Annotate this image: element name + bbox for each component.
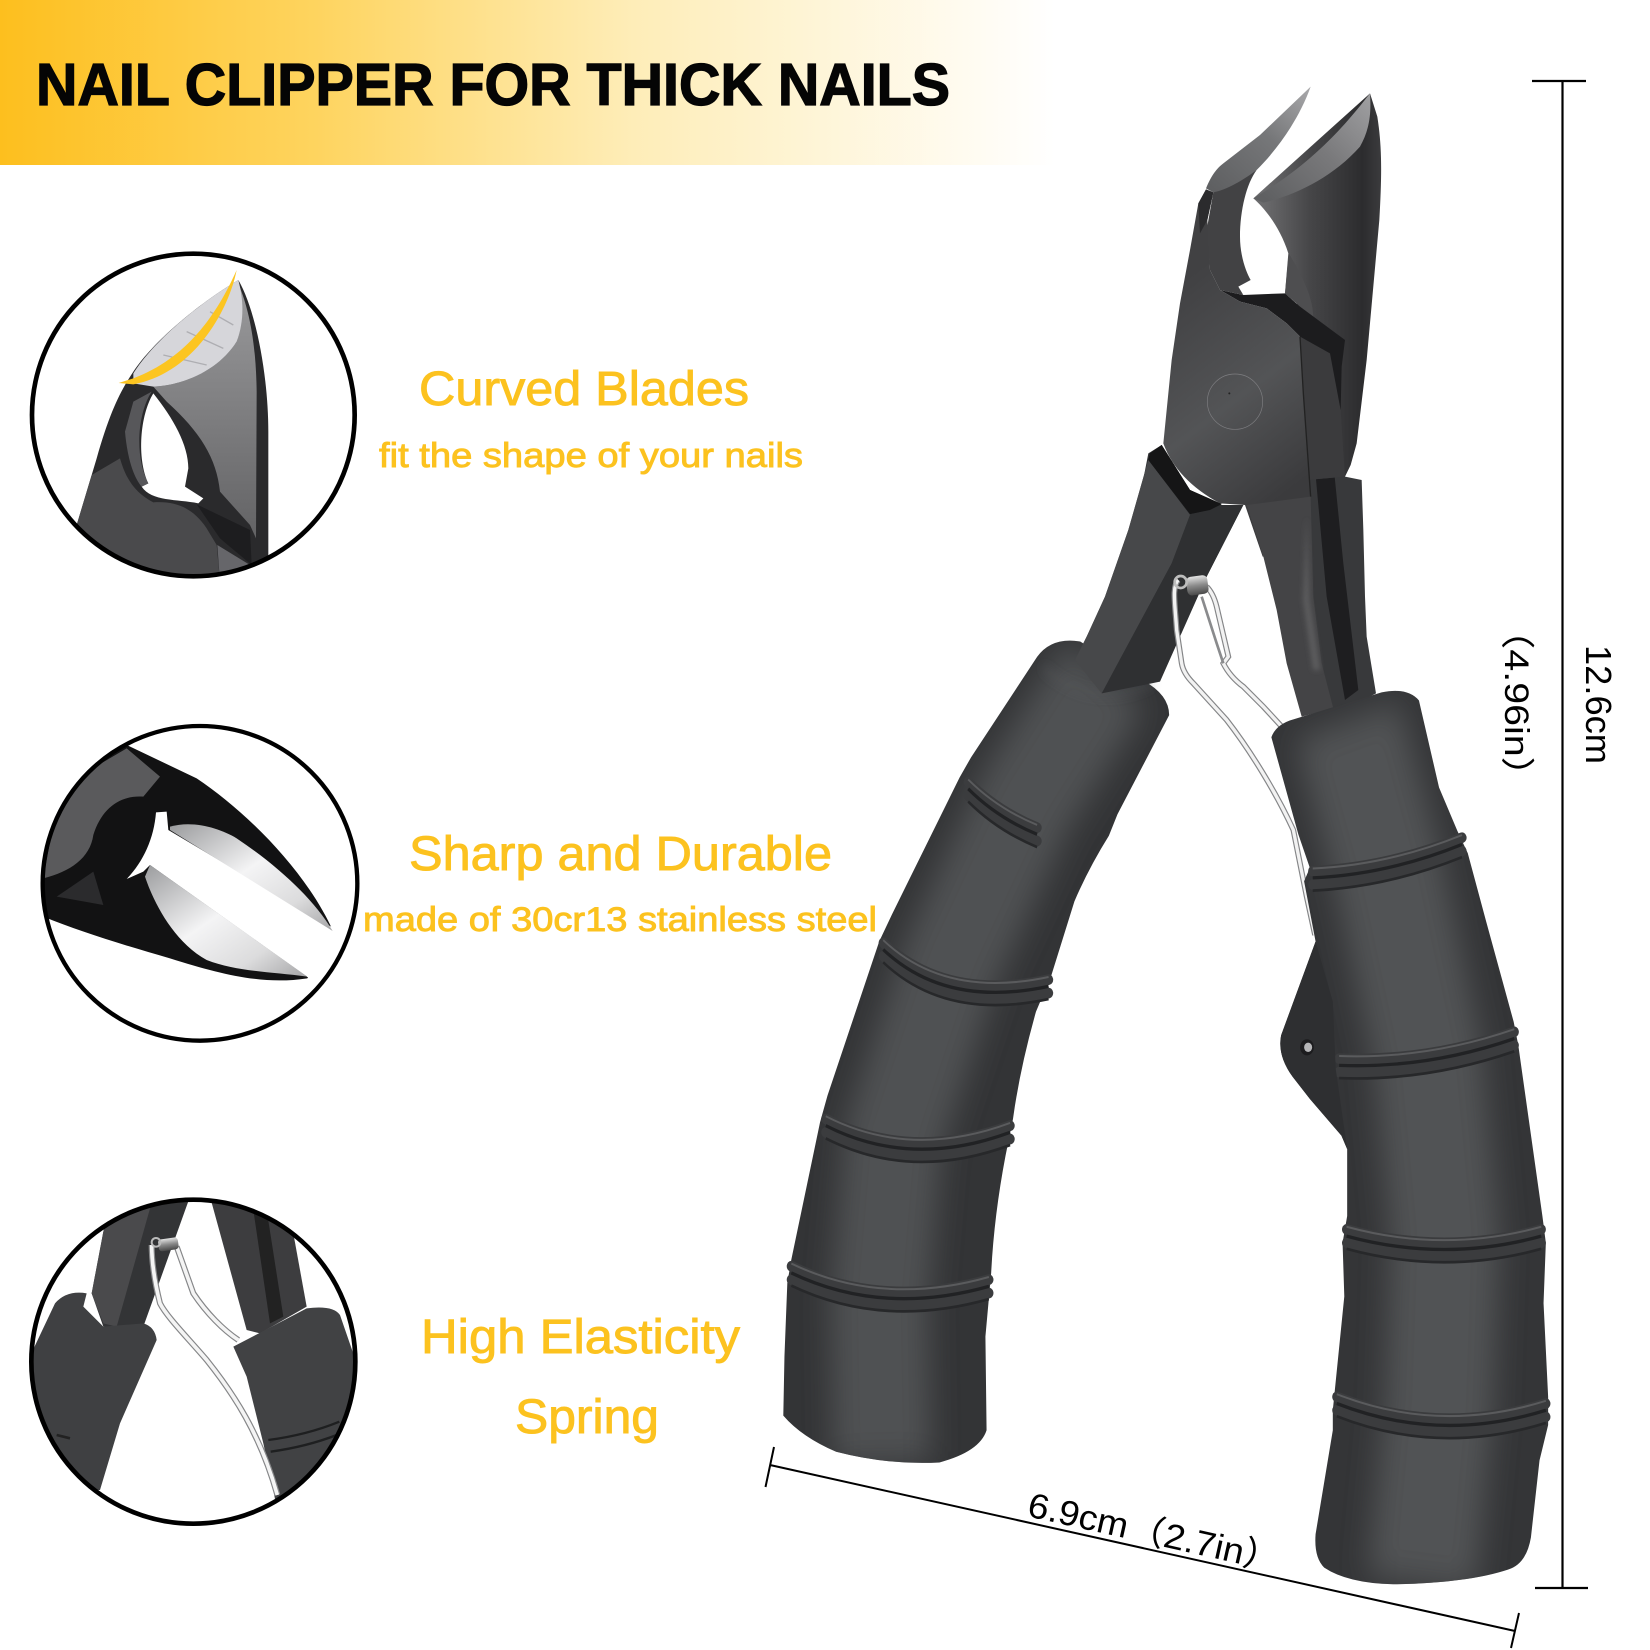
handle tab <box>1280 941 1347 1149</box>
clipper head <box>1163 87 1381 557</box>
lower jaw section <box>1300 337 1345 480</box>
label: sharp and durable <box>363 828 877 939</box>
sub-label: steel: made of 30cr13 stainless steel <box>363 901 877 939</box>
sub-label: curved blades: fit the shape of your nails <box>379 437 803 475</box>
tab pin <box>1300 1039 1314 1055</box>
spring hinge <box>1185 575 1209 596</box>
width label: 6.9cm（2.7in） <box>1024 1486 1285 1580</box>
inner jaw face <box>1285 253 1313 318</box>
dimension: width <box>766 1447 1519 1648</box>
right jaw <box>1253 93 1381 480</box>
label: curved blades <box>379 363 803 475</box>
left handle rim <box>1043 667 1152 694</box>
right blade bevel <box>1253 93 1370 203</box>
title: NAIL CLIPPER FOR THICK NAILS <box>36 52 950 118</box>
label: high elasticity spring: High Elasticity <box>421 1311 740 1364</box>
label line two: Spring <box>515 1391 659 1444</box>
height label cm: 12.6cm <box>1578 645 1619 764</box>
detail circle: curved blades <box>32 254 355 582</box>
height label inches: （4.96in） <box>1497 610 1535 796</box>
label: high elasticity spring <box>421 1311 740 1444</box>
right handle <box>1271 691 1548 1584</box>
pivot ridge <box>1220 290 1345 410</box>
detail circle: sharp blades <box>40 726 357 1041</box>
dimension: height <box>1497 81 1619 1588</box>
left jaw inner face <box>1207 170 1257 295</box>
pivot circle mark <box>1207 374 1263 429</box>
left lever entering handle <box>1075 445 1243 693</box>
left neck shadow <box>1198 189 1213 233</box>
detail circle: spring <box>27 1197 357 1527</box>
left blade bevel <box>1206 87 1311 192</box>
header banner <box>0 0 1055 165</box>
left handle <box>783 641 1169 1464</box>
label: curved blades: Curved Blades <box>419 363 749 416</box>
main plate <box>1163 189 1311 557</box>
plate edge <box>1300 337 1311 497</box>
lower metal levers <box>1075 430 1376 717</box>
label: sharp and durable: Sharp and Durable <box>409 828 832 881</box>
spring wire <box>1174 575 1315 935</box>
product: nail clipper <box>783 87 1548 1584</box>
plate to right lever <box>1247 497 1333 717</box>
